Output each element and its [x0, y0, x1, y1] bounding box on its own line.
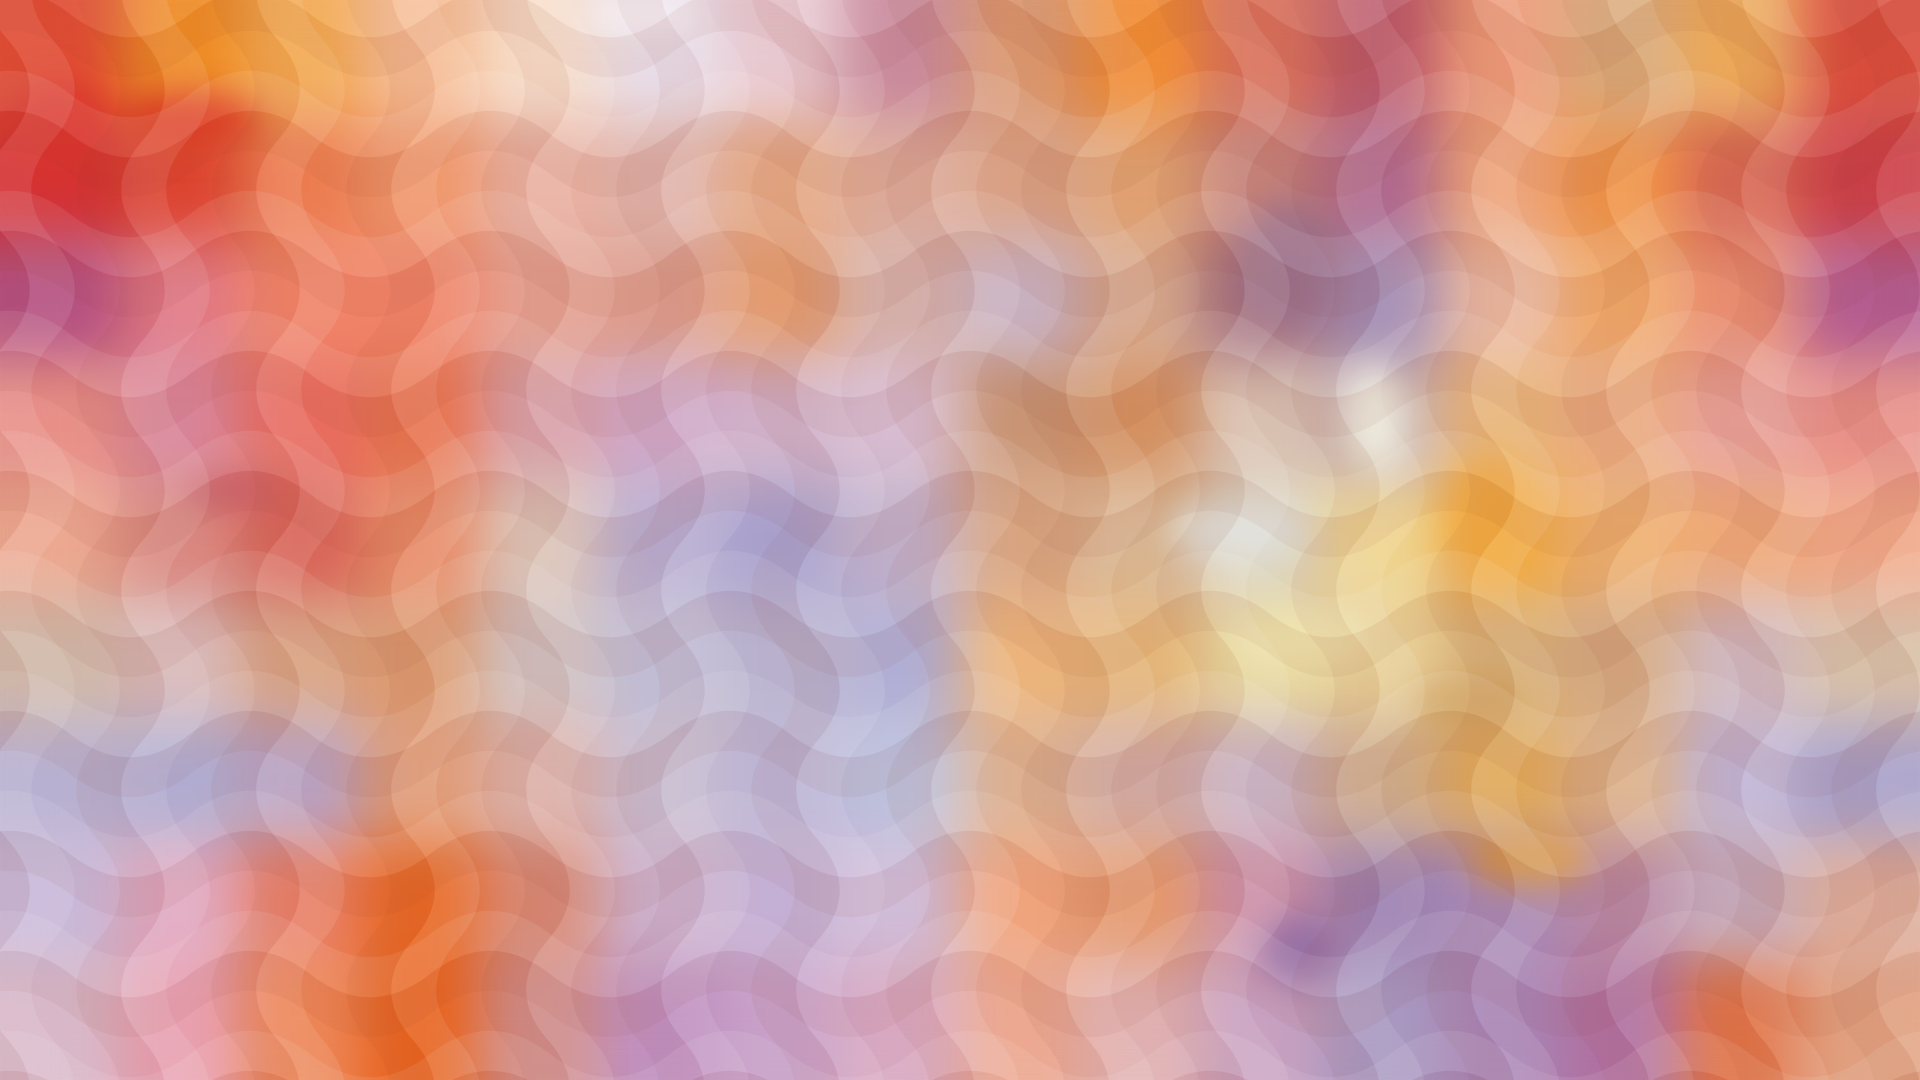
colour accents [10, 0, 1590, 986]
